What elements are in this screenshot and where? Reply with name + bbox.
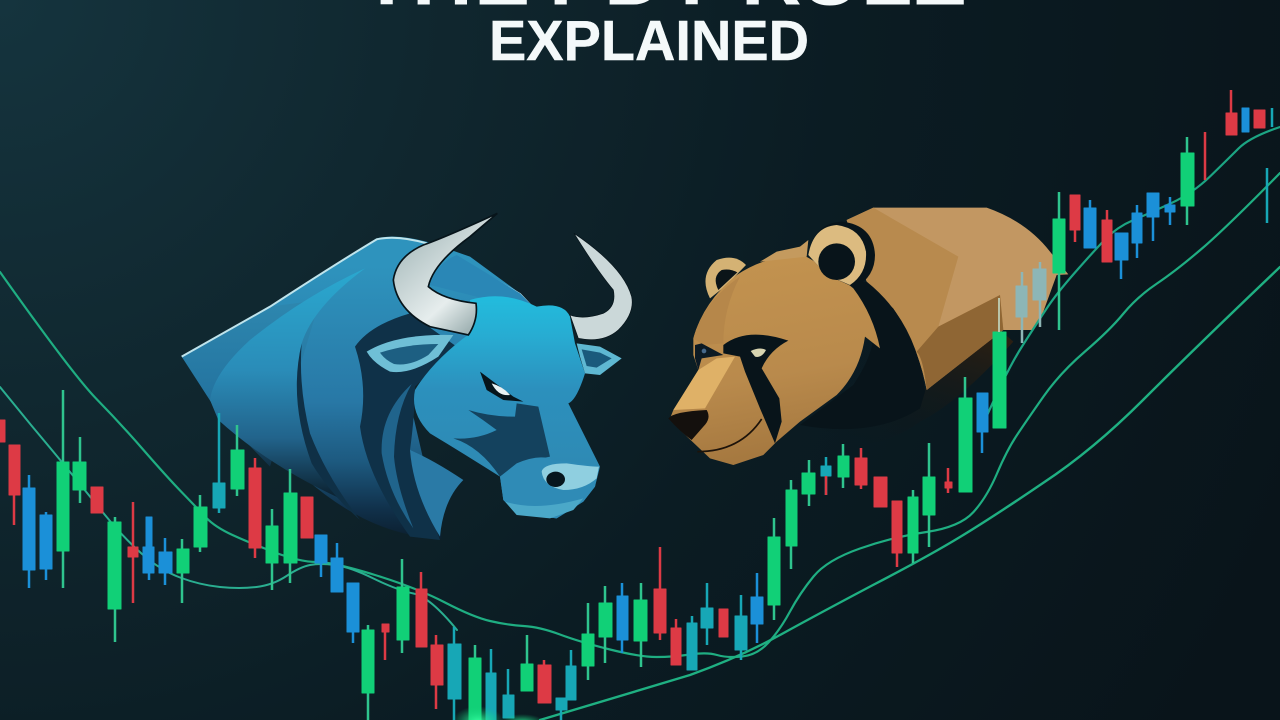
title line two: EXPLAINED	[489, 9, 809, 73]
bear neck band	[800, 282, 925, 429]
bear fur tuft	[760, 240, 808, 262]
bull horn left	[393, 213, 497, 335]
bull area between horns	[430, 255, 537, 310]
green candles	[57, 137, 1194, 720]
bull shoulder band	[210, 268, 365, 500]
bear head	[670, 255, 880, 465]
bull eye	[480, 372, 523, 402]
bear ear left	[705, 258, 746, 298]
rising moving average	[540, 267, 1280, 720]
bear snout	[673, 357, 735, 410]
bull horn right	[570, 233, 632, 340]
glow at bottom edge	[452, 706, 546, 720]
bull back silhouette	[218, 237, 537, 538]
title	[361, 0, 967, 73]
bull face shadow	[453, 403, 550, 477]
bull ear right	[577, 343, 622, 375]
bear ear right	[808, 222, 875, 288]
teal candles	[213, 108, 1272, 720]
bull body stripes	[297, 343, 360, 520]
bull left wedge	[182, 300, 320, 467]
bull muzzle	[500, 457, 599, 518]
bear lower facet	[917, 295, 1003, 390]
bear body	[847, 208, 1068, 390]
bull ear left	[367, 335, 453, 372]
pale candles over bear	[1016, 262, 1046, 343]
icon: bull	[182, 213, 632, 540]
bull head	[414, 296, 600, 518]
bear nose	[668, 410, 709, 440]
blue candles	[23, 108, 1249, 653]
icon: bear	[668, 208, 1068, 465]
upper right moving average	[985, 127, 1280, 420]
lower left moving average	[0, 387, 457, 630]
bear mouth	[697, 419, 762, 452]
bear neck shadow	[813, 330, 1013, 443]
bull back edge highlight	[182, 238, 538, 357]
bear shoulder facet	[847, 208, 1003, 390]
bear eye mask	[695, 335, 788, 443]
bear forehead fold	[693, 277, 740, 345]
upper moving average	[0, 173, 1280, 657]
